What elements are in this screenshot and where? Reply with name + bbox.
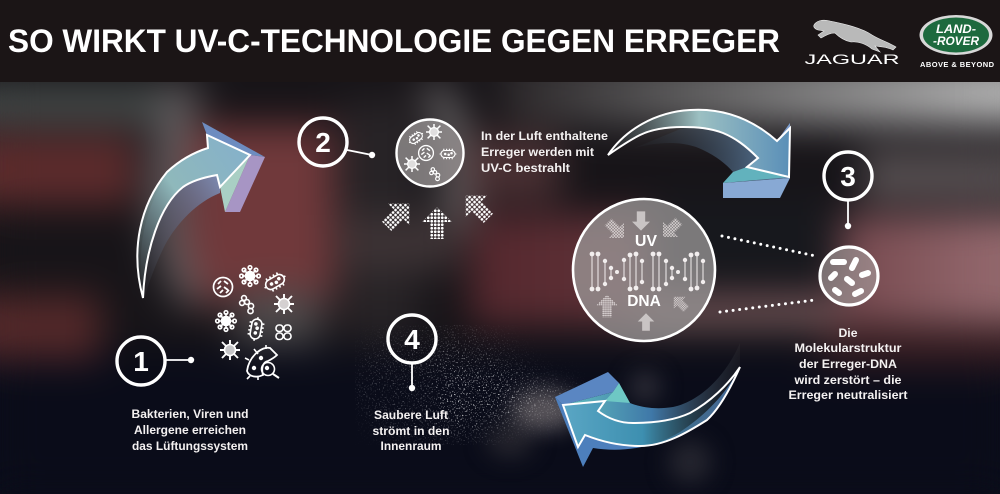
icon: virus left	[216, 311, 236, 331]
arrow 3: left	[555, 343, 740, 467]
text: step 1: das Lüftungssystem	[132, 441, 248, 453]
particle spray of clean air	[355, 325, 585, 445]
icon: spiked germ bottom	[220, 340, 240, 360]
text: step 4: Saubere Luft	[374, 410, 448, 422]
icon: double cell	[276, 325, 291, 340]
germs cluster	[214, 266, 294, 380]
marker 3	[824, 152, 872, 229]
marker 2: 2	[315, 127, 331, 158]
logo: Land Rover	[920, 15, 995, 69]
icon: bacterium vertical	[247, 316, 265, 342]
dotted connector lines	[720, 236, 816, 312]
text: step 2: In der Luft enthaltene	[481, 131, 608, 143]
arrow 2: right	[608, 110, 790, 198]
icon: cluster	[240, 296, 254, 314]
destroyed germ circle	[820, 247, 878, 305]
text: step 3	[788, 328, 908, 402]
marker 2	[299, 118, 375, 166]
marker 1: 1	[133, 346, 149, 377]
text: step 3: der Erreger-DNA	[799, 359, 897, 371]
text: step 2: UV-C bestrahlt	[481, 163, 570, 175]
logo: Jaguar: JAGUAR	[804, 52, 900, 67]
text: step 4	[372, 410, 450, 453]
marker 4	[388, 315, 436, 391]
dotted arrows towards germs circle	[376, 185, 499, 239]
title: SO WIRKT UV-C-TECHNOLOGIE GEGEN ERREGER	[8, 23, 780, 59]
logo: Jaguar	[804, 20, 900, 67]
logo: Land Rover: -ROVER	[933, 34, 979, 48]
logo: Land Rover: ABOVE & BEYOND	[920, 60, 995, 69]
text: step 2	[481, 131, 608, 175]
marker 1	[117, 337, 194, 385]
DNA circle	[573, 199, 715, 341]
text: step 3: Molekularstruktur	[794, 343, 902, 355]
DNA circle: DNA	[627, 293, 661, 310]
text: step 4: strömt in den	[372, 426, 450, 438]
text: step 1: Allergene erreichen	[134, 425, 246, 437]
header bar	[0, 0, 1000, 82]
marker 3: 3	[840, 161, 856, 192]
text: step 2: Erreger werden mit	[481, 147, 594, 159]
icon: spiked germ right	[274, 294, 294, 314]
text: step 3: Erreger neutralisiert	[788, 390, 908, 402]
icon: germ under magnifier	[245, 345, 279, 380]
irradiated germs circle	[396, 120, 464, 186]
icon: petri germ	[214, 278, 232, 296]
icon: bacterium top	[261, 270, 289, 294]
text: step 3: Die	[838, 328, 858, 340]
arrow 1: upward	[137, 122, 265, 300]
text: step 4: Innenraum	[380, 441, 442, 453]
icon: virus top	[240, 266, 260, 286]
DNA circle: UV	[635, 233, 657, 250]
text: step 1	[132, 409, 248, 453]
logo: Land Rover: LAND-	[936, 22, 976, 36]
text: step 1: Bakterien, Viren und	[132, 409, 248, 421]
text: step 3: wird zerstört – die	[793, 375, 902, 387]
marker 4: 4	[404, 324, 420, 355]
